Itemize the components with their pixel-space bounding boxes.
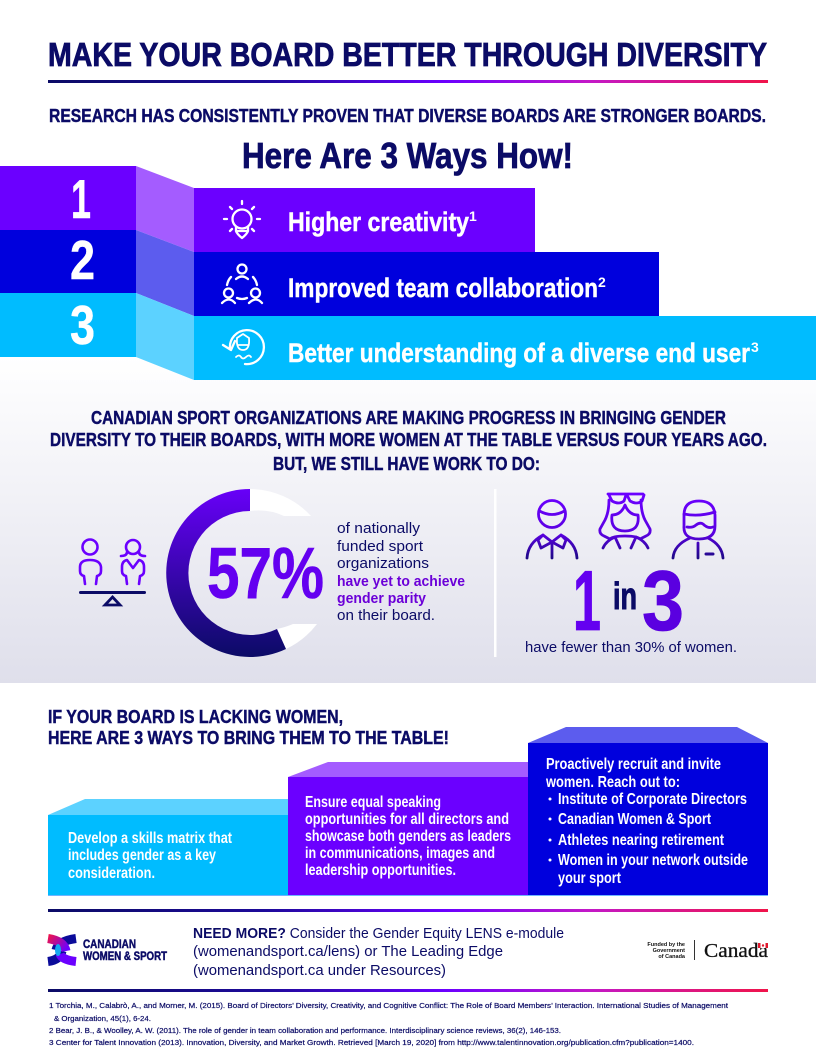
icon: man with collar (527, 500, 577, 558)
panel: step 2 equal speaking: showcase both genders as leaders (305, 828, 511, 845)
text block: 57 percent description: organizations (337, 556, 429, 572)
footnotes: 1 Torchia, M., Calabrò, A., and Morner, M. (2015). Board of Directors’ Diversity, Creativity, and Cognitive Conflict: The Role of Board Members’ Interaction. International Studies of Management (49, 1001, 729, 1010)
logo: government of canada: Canada (704, 940, 768, 962)
panel: ribbon 3 diverse end user (0, 293, 816, 380)
panel: stats background (0, 357, 816, 683)
text block: 57 percent description: of nationally (337, 521, 421, 537)
text block: 57 percent description: have yet to achieve (337, 574, 465, 590)
big number: 57% (207, 534, 324, 614)
panel: step 3 recruit women: Canadian Women & Sport (558, 811, 711, 828)
panel: ribbon 2 team collaboration: 2 (70, 229, 95, 291)
logo: canadian women and sport: WOMEN & SPORT (83, 949, 168, 963)
panel: ribbon 2 team collaboration (0, 229, 659, 316)
panel: step 3 recruit women: Proactively recruit and invite (546, 756, 721, 773)
panel: ribbon 2 team collaboration: 2 (598, 274, 606, 290)
icon: user cycle (223, 330, 264, 364)
heading: progress statement (50, 407, 767, 474)
logo: government of canada: Funded by the (647, 942, 685, 948)
panel: step 1 skills matrix: consideration. (68, 865, 155, 882)
logo: canadian women and sport (48, 937, 168, 963)
heading: lacking women: IF YOUR BOARD IS LACKING WOMEN, (48, 706, 343, 727)
text block: 57 percent description: on their board. (337, 608, 435, 624)
text block: need more: NEED MORE? Consider the Gender Equity LENS e-module (193, 926, 564, 942)
panel: step 3 recruit women: women. Reach out to: (545, 774, 680, 791)
icon: bearded man (673, 501, 723, 558)
text: fewer than 30 percent: have fewer than 30% of women. (525, 640, 737, 656)
chart: 57 percent donut (166, 489, 324, 657)
footnotes: & Organization, 45(1), 6-24. (54, 1014, 151, 1023)
text block: 57 percent description: gender parity (337, 591, 426, 607)
logo: government of canada (647, 940, 768, 962)
heading: lacking women (48, 706, 449, 748)
logo: government of canada: Government (653, 948, 685, 954)
heading: lacking women: HERE ARE 3 WAYS TO BRING THEM TO THE TABLE! (48, 727, 449, 748)
icon: woman with glasses (600, 494, 650, 548)
panel: step 3 recruit women (528, 727, 768, 895)
text block: 57 percent description (337, 521, 465, 624)
footnotes: 3 Center for Talent Innovation (2013). Innovation, Diversity, and Market Growth. Retrieved [March 19, 2020] from http://www.talentinnovation.org/publication.cfm?publication=1400. (49, 1038, 694, 1047)
panel: ribbon 3 diverse end user: 3 (751, 339, 759, 355)
stat: 1 in 3: 3 (642, 554, 684, 649)
stat: 1 in 3 (573, 554, 684, 649)
panel: ribbon 3 diverse end user: 3 (70, 294, 95, 356)
footnotes: 2 Bear, J. B., & Woolley, A. W. (2011). The role of gender in team collaboration and performance. Interdisciplinary science reviews, 36(2), 146-153. (49, 1026, 561, 1035)
stat: 1 in 3: in (613, 576, 637, 618)
panel: step 3 recruit women: your sport (558, 870, 621, 887)
panel: step 3 recruit women: Women in your network outside (558, 852, 748, 869)
panel: step 1 skills matrix: includes gender as a key (68, 847, 216, 864)
stat: 1 in 3: 1 (573, 554, 601, 649)
panel: step 2 equal speaking (288, 762, 528, 895)
heading: progress statement: BUT, WE STILL HAVE WORK TO DO: (273, 453, 540, 474)
panel: ribbon 1 higher creativity (0, 166, 535, 252)
panel: step 3 recruit women: Athletes nearing retirement (558, 832, 724, 849)
panel: ribbon 1 higher creativity: Higher creativity (288, 207, 469, 237)
footnotes (49, 1001, 729, 1047)
logo: canadian women and sport: CANADIAN (83, 937, 136, 951)
text block: need more (193, 926, 564, 979)
panel: step 1 skills matrix: Develop a skills matrix that (68, 830, 232, 847)
text block: need more: (womenandsport.ca/lens) or The Leading Edge (193, 944, 503, 960)
panel: ribbon 1 higher creativity: 1 (469, 208, 477, 224)
panel: step 2 equal speaking: in communications, images and (305, 845, 495, 862)
icon: light bulb (224, 201, 260, 238)
panel: ribbon 2 team collaboration: Improved team collaboration (288, 273, 598, 303)
panel: step 3 recruit women: Institute of Corporate Directors (558, 791, 747, 808)
panel: step 1 skills matrix (48, 799, 288, 895)
icon: team circle (222, 264, 262, 303)
heading: here are 3 ways: Here Are 3 Ways How! (242, 135, 573, 176)
logo: government of canada: of Canada (658, 954, 686, 960)
text block: need more: (womenandsport.ca under Resources) (193, 963, 446, 979)
panel: step 2 equal speaking: leadership opportunities. (305, 862, 456, 879)
panel: step 2 equal speaking: opportunities for all directors and (305, 811, 509, 828)
panel: step 2 equal speaking: Ensure equal speaking (305, 794, 441, 811)
icon: gender balance scale (79, 540, 146, 605)
panel: ribbon 1 higher creativity: 1 (71, 168, 91, 230)
text block: 57 percent description: funded sport (337, 539, 423, 555)
